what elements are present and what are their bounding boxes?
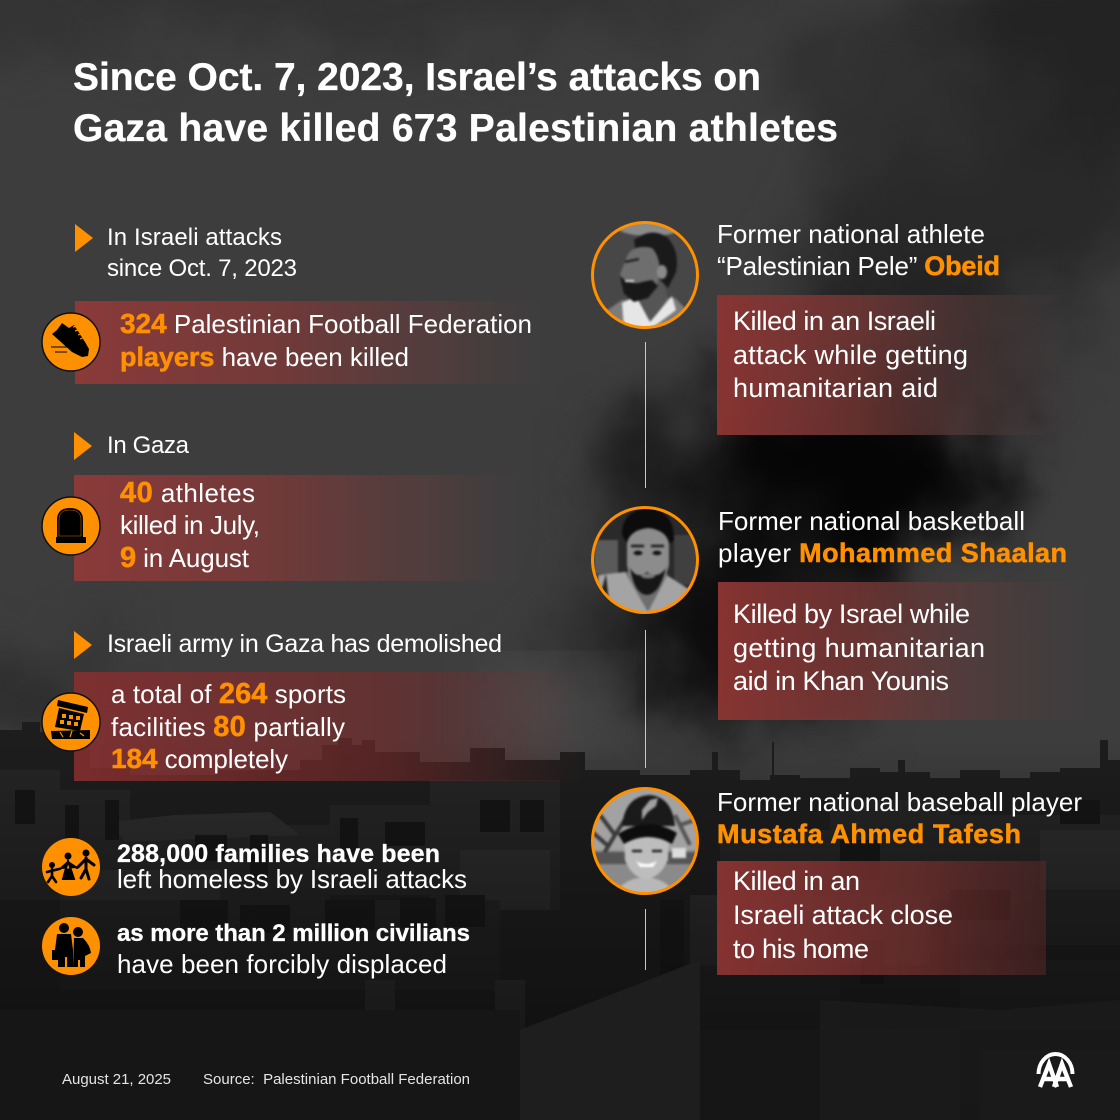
icon: displaced couple — [42, 917, 100, 975]
panel text — [120, 308, 532, 372]
profile: Mohammed Shaalan — [592, 506, 1093, 720]
distant skyline — [0, 722, 1120, 1120]
panel: circumstances of death — [718, 582, 1093, 720]
timeline connector lines — [644, 342, 646, 970]
panel text: 40 athletes — [120, 477, 255, 509]
arrow marker — [75, 224, 93, 252]
portrait: Mustafa Ahmed Tafesh — [590, 785, 700, 895]
mid buildings — [0, 770, 1120, 945]
stat: civilians displaced — [42, 917, 470, 979]
section: demolished facilities — [42, 630, 584, 781]
panel text: facilities 80 partially — [111, 711, 345, 743]
panel text: aid in Khan Younis — [733, 666, 949, 696]
portrait: Mohammed Shaalan — [592, 508, 704, 620]
panel text: Killed by Israel while — [733, 599, 970, 629]
icon: tombstone — [42, 497, 100, 555]
name — [717, 787, 1082, 849]
section: In Gaza — [42, 432, 524, 581]
icon: fleeing family — [42, 838, 100, 896]
panel: sports facilities — [74, 672, 584, 781]
panel text: attack while getting — [733, 340, 968, 370]
name — [717, 219, 1000, 281]
panel text: killed in July, — [120, 510, 260, 540]
name: Former national baseball player — [717, 787, 1082, 817]
arrow marker — [74, 631, 92, 659]
panel: circumstances of death — [717, 861, 1046, 975]
stat text: left homeless by Israeli attacks — [117, 864, 467, 894]
name: Mustafa Ahmed Tafesh — [717, 819, 1021, 849]
title — [73, 56, 838, 150]
panel text: 9 in August — [120, 542, 250, 574]
footer: date: August 21, 2025 — [62, 1071, 171, 1088]
panel text: 184 completely — [111, 743, 288, 774]
stat text — [117, 920, 470, 979]
name: player Mohammed Shaalan — [718, 538, 1067, 568]
title: Gaza have killed 673 Palestinian athletes — [73, 107, 838, 150]
panel: football players — [75, 301, 545, 384]
panel: athletes killed — [74, 475, 524, 581]
icon: running shoe — [42, 313, 100, 371]
panel text: Israeli attack close — [733, 900, 953, 930]
footer: source: Source: Palestinian Football Federation — [203, 1071, 470, 1088]
title: Since Oct. 7, 2023, Israel’s attacks on — [73, 56, 761, 99]
panel text: Killed in an — [733, 866, 860, 896]
arrow marker — [74, 432, 92, 460]
stat text: have been forcibly displaced — [117, 949, 447, 979]
panel text — [733, 599, 985, 696]
panel text — [733, 306, 968, 403]
panel: circumstances of death — [717, 295, 1072, 435]
section heading — [107, 224, 297, 282]
stat text: as more than 2 million civilians — [117, 920, 470, 947]
panel text: getting humanitarian — [733, 633, 985, 663]
section heading: since Oct. 7, 2023 — [107, 255, 297, 282]
panel text — [733, 866, 953, 964]
section: Israeli attacks since Oct. 7 — [42, 224, 545, 384]
panel text — [111, 678, 346, 774]
profile: Mustafa Ahmed Tafesh — [590, 785, 1082, 975]
logo: AA monogram — [1038, 1054, 1072, 1087]
section heading: Israeli army in Gaza has demolished — [107, 630, 502, 658]
panel text — [120, 477, 260, 574]
panel text: to his home — [733, 934, 869, 964]
panel text: Killed in an Israeli — [733, 306, 936, 336]
icon: collapsed building — [42, 693, 100, 751]
panel text: 324 Palestinian Football Federation — [120, 308, 532, 339]
section heading: In Gaza — [107, 432, 190, 459]
stat text: 288,000 families have been — [117, 840, 440, 868]
panel text: a total of 264 sports — [111, 678, 346, 710]
stat text — [117, 840, 467, 894]
name — [718, 506, 1067, 568]
panel text: humanitarian aid — [733, 373, 938, 403]
name: Former national athlete — [717, 219, 985, 249]
portrait: Obeid — [592, 216, 698, 335]
panel text: players have been killed — [120, 342, 409, 372]
name: “Palestinian Pele” Obeid — [717, 251, 1000, 281]
name: Former national basketball — [718, 506, 1025, 536]
profile: Obeid — [591, 221, 1032, 435]
stat: families homeless — [42, 838, 467, 896]
section heading: In Israeli attacks — [107, 224, 282, 251]
